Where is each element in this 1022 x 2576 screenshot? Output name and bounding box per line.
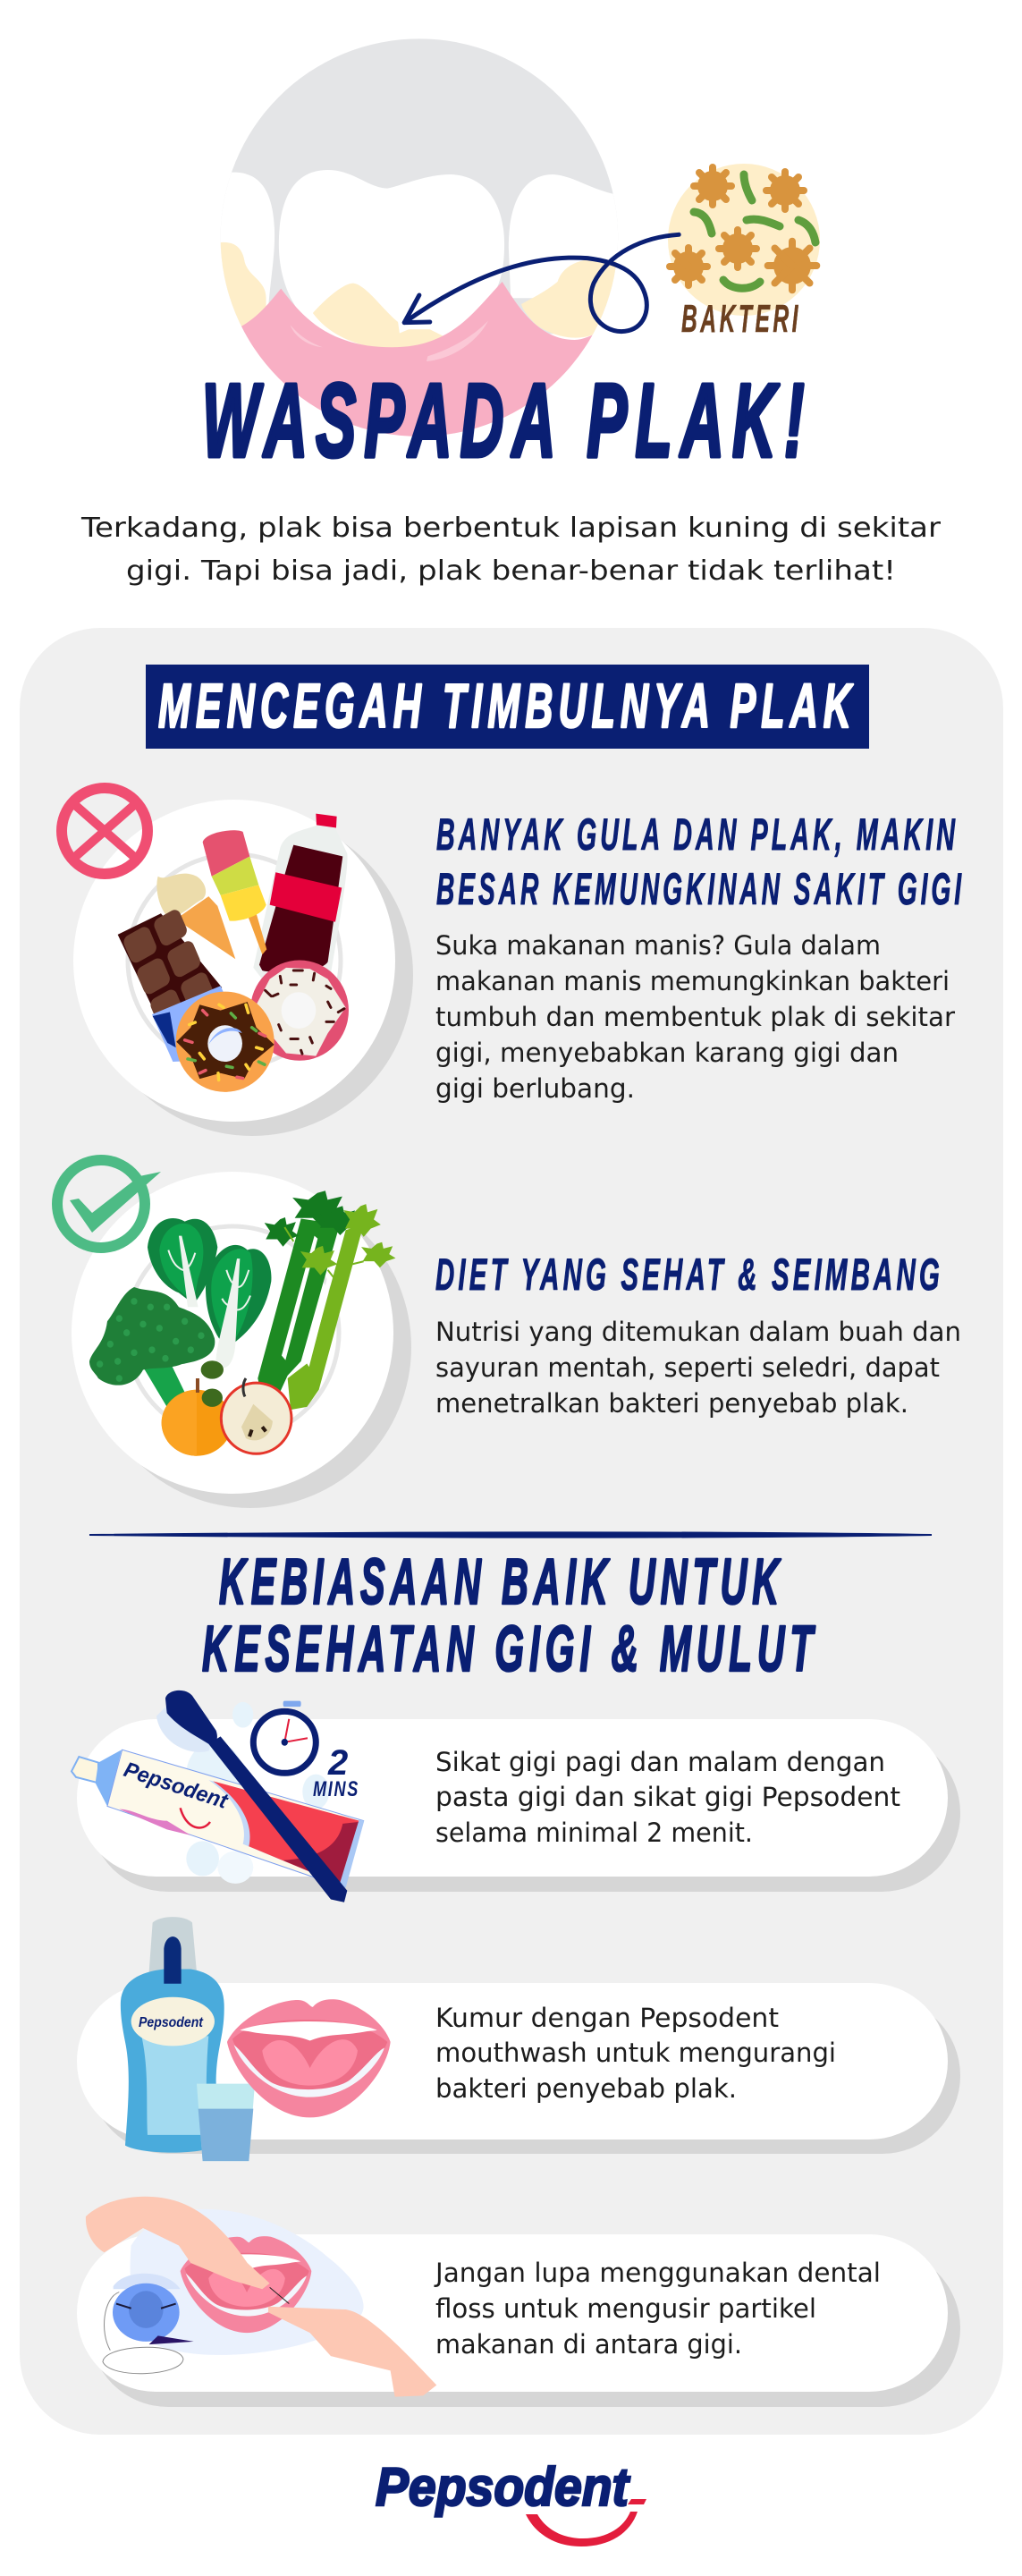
label: 2 mins: 2 (327, 1743, 351, 1783)
illustration: bacteria circle (668, 164, 820, 316)
arrow: bacteria to plaque (404, 234, 679, 332)
text block: healthy diet: Nutrisi yang ditemukan dalam buah dan (435, 1317, 961, 1347)
pill: flossing (77, 2197, 960, 2407)
text: brushing advice: selama minimal 2 menit. (435, 1818, 753, 1848)
logo: pepsodent: Pepsodent (376, 2457, 631, 2517)
label: bottle brand: Pepsodent (139, 2015, 204, 2030)
heading: kebiasaan baik (202, 1546, 818, 1685)
text block: healthy diet: menetralkan bakteri penyebab plak. (435, 1388, 908, 1419)
plate: healthy foods (72, 1172, 411, 1508)
label: 2 mins (313, 1743, 359, 1801)
text block: sugar and plaque: gigi, menyebabkan karang gigi dan (435, 1038, 899, 1068)
illustration: floss and hands (86, 2197, 436, 2397)
logo: pepsodent (376, 2457, 646, 2546)
text block: sugar and plaque: makanan manis memungkinkan bakteri (435, 966, 950, 996)
intro text: gigi. Tapi bisa jadi, plak benar-benar tidak terlihat! (126, 555, 896, 587)
text: brushing advice: Sikat gigi pagi dan malam dengan (435, 1747, 885, 1777)
pill: brushing (72, 1690, 960, 1902)
text block: healthy diet: sayuran mentah, seperti seledri, dapat (435, 1352, 940, 1383)
label: 2 mins: MINS (313, 1777, 359, 1801)
text: mouthwash advice: Kumur dengan Pepsodent (435, 2003, 779, 2033)
heading: mencegah timbulnya plak (146, 665, 869, 749)
label: bakteri: BAKTERI (681, 297, 801, 341)
text block: sugar and plaque: tumbuh dan membentuk plak di sekitar (435, 1002, 955, 1032)
text: flossing advice: Jangan lupa menggunakan dental (434, 2258, 881, 2288)
label: tube brand: Pepsodent (121, 1758, 232, 1814)
text: brushing advice: pasta gigi dan sikat gigi Pepsodent (435, 1782, 900, 1812)
text block: sugar and plaque: gigi berlubang. (435, 1073, 635, 1104)
text: flossing advice (434, 2258, 881, 2360)
text block: sugar and plaque (435, 809, 965, 1104)
illustration: mouthwash bottle and glass (121, 1917, 391, 2161)
illustration: tooth with plaque (217, 36, 626, 447)
intro text (80, 513, 942, 587)
text: mouthwash advice: mouthwash untuk mengurangi (435, 2038, 836, 2068)
plate: sugary foods (73, 800, 413, 1136)
food illustration: sweets (118, 814, 349, 1092)
panel: main grey background (20, 628, 1003, 2435)
text block: healthy diet (435, 1250, 961, 1419)
text: flossing advice: makanan di antara gigi. (435, 2329, 742, 2360)
intro text: Terkadang, plak bisa berbentuk lapisan kuning di sekitar (80, 513, 942, 544)
text: flossing advice: floss untuk mengusir partikel (435, 2293, 816, 2324)
food illustration: vegetables and fruit (89, 1191, 395, 1456)
icon: red cross mark (62, 788, 148, 874)
text: mouthwash advice (435, 2003, 836, 2104)
pill: mouthwash (77, 1917, 960, 2161)
illustration: toothpaste, brush and timer (72, 1690, 364, 1902)
icon: green check mark (57, 1160, 161, 1248)
text block: sugar and plaque: Suka makanan manis? Gula dalam (435, 930, 881, 961)
text: mouthwash advice: bakteri penyebab plak. (435, 2073, 737, 2104)
text: brushing advice (435, 1747, 900, 1848)
